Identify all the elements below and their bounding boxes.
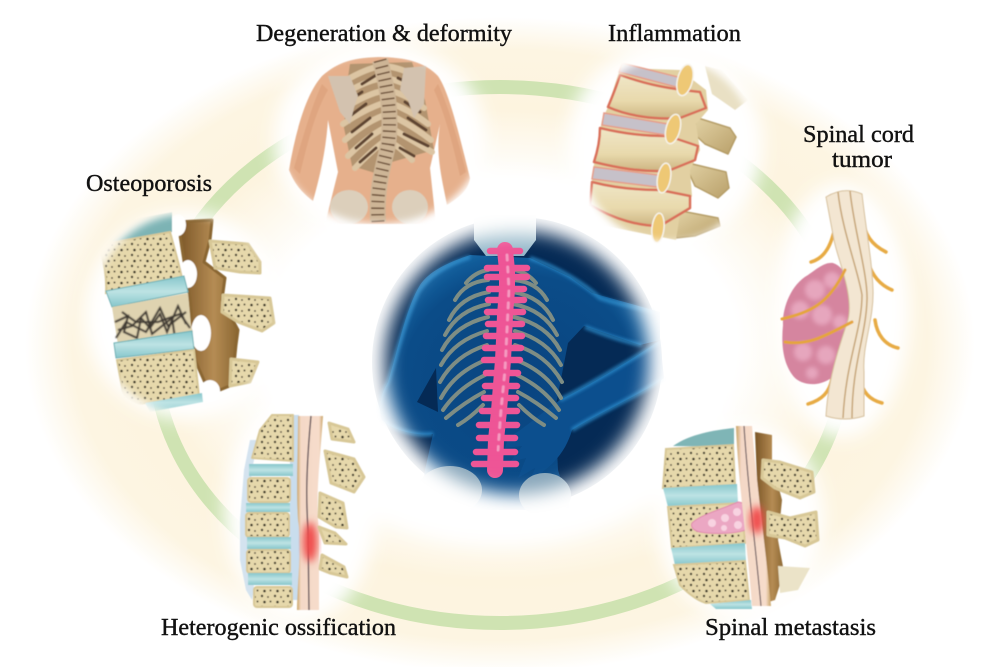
top disc xyxy=(114,212,172,240)
label: heterogenic ossification: Heterogenic ossification xyxy=(161,615,396,641)
spinous processes xyxy=(319,423,364,577)
osteoporotic dark trabeculae xyxy=(115,306,190,338)
illustration: inflammation vertebrae xyxy=(590,63,748,244)
label: spinal cord tumor: Spinal cord xyxy=(803,122,914,148)
upper disc xyxy=(663,484,738,507)
spinal cord column xyxy=(826,191,873,419)
backing column xyxy=(590,68,708,240)
vertebra with metastasis xyxy=(668,503,745,548)
bottom disc xyxy=(710,600,752,609)
brown posterior column xyxy=(178,220,238,394)
upper vertebra xyxy=(98,232,182,293)
arm shading xyxy=(294,84,466,176)
red compression glow xyxy=(750,506,764,534)
label: spinal metastasis: Spinal metastasis xyxy=(705,615,876,641)
dark navy backdrop xyxy=(372,217,662,507)
pelvis bones xyxy=(426,466,482,502)
upper disc xyxy=(106,276,188,307)
illustration: degeneration and deformity back xyxy=(289,57,470,224)
curved spine xyxy=(378,60,390,222)
inflamed facet joints xyxy=(650,63,696,244)
brown posterior bits xyxy=(755,432,784,604)
intervertebral discs xyxy=(592,63,682,187)
anterior ligament xyxy=(240,440,258,600)
skin silhouette of torso and arms xyxy=(289,57,470,224)
dark gap near left arm xyxy=(417,368,438,412)
spine highlight xyxy=(498,255,509,450)
shoulder blades xyxy=(328,76,358,124)
discs xyxy=(246,464,293,585)
lower disc xyxy=(114,331,194,358)
illustration: spinal metastasis xyxy=(663,426,818,609)
nerve roots behind tumor xyxy=(808,215,898,404)
spinous processes xyxy=(676,66,748,238)
center illustration: blue body with pink spine xyxy=(372,215,664,517)
label: spinal cord tumor: tumor xyxy=(832,147,892,173)
label: inflammation: Inflammation xyxy=(608,21,741,47)
lower vertebra xyxy=(674,561,749,603)
neck xyxy=(474,215,536,256)
label: osteoporosis: Osteoporosis xyxy=(86,171,212,197)
pink spine xyxy=(474,250,527,470)
transverse processes xyxy=(210,241,274,386)
spinal cord xyxy=(736,426,771,606)
left ribs xyxy=(440,270,489,425)
dark rib shadows xyxy=(350,74,428,162)
illustration: osteoporosis vertebrae xyxy=(98,212,274,412)
middle disc xyxy=(671,543,746,565)
spine column xyxy=(495,250,507,470)
ribs xyxy=(343,66,432,168)
spinal cord xyxy=(297,416,323,610)
tumor mass xyxy=(782,263,853,384)
bottom disc xyxy=(145,393,203,412)
top disc xyxy=(673,428,734,447)
blue body silhouette xyxy=(380,255,660,510)
ribcage dark gaps xyxy=(344,62,434,176)
vertebrae xyxy=(246,415,293,607)
illustration: heterogenic ossification spine xyxy=(240,415,364,610)
arm highlights xyxy=(380,257,664,434)
openings between pedicles xyxy=(170,214,220,402)
illustration: spinal cord tumor xyxy=(782,191,898,419)
spinous processes xyxy=(762,460,818,593)
lower vertebra xyxy=(117,350,199,404)
label: degeneration and deformity: Degeneration & deformity xyxy=(256,21,512,47)
right ribs xyxy=(513,270,562,425)
vertebral bodies xyxy=(590,75,706,226)
white halos behind illustrations xyxy=(85,42,910,622)
ribs xyxy=(440,270,562,425)
vertebral processes xyxy=(474,251,527,464)
upper vertebra xyxy=(663,445,735,488)
red compression glow xyxy=(303,522,317,562)
porous vertebra xyxy=(112,293,193,345)
tumor lobules xyxy=(791,272,847,379)
green connecting ring xyxy=(155,87,845,623)
label: spinal cord tumor xyxy=(803,122,914,173)
forearm and hand xyxy=(506,347,664,462)
hip bones xyxy=(330,190,368,224)
nerve roots over tumor xyxy=(782,270,852,343)
pink metastatic tumor xyxy=(691,502,750,533)
